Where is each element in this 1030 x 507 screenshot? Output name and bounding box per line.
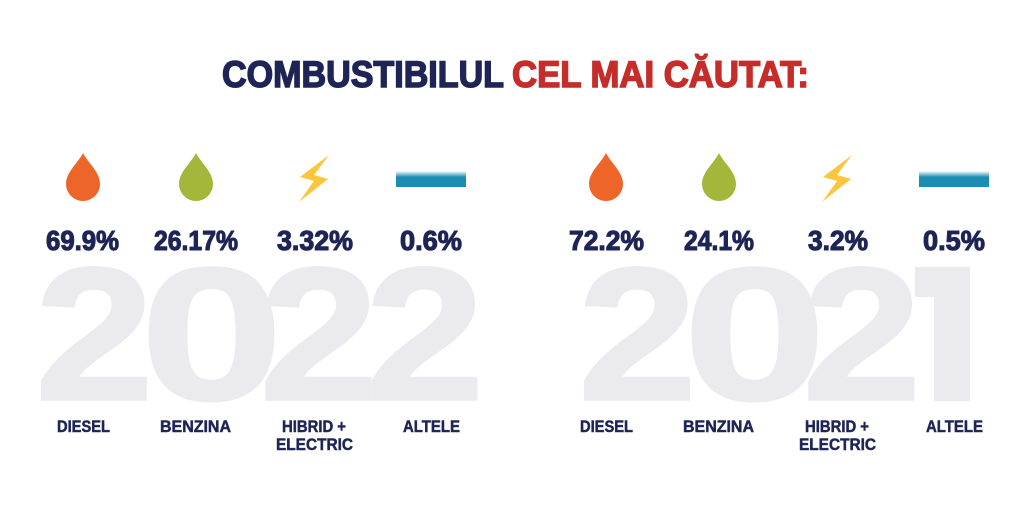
year number 2021: 1 (879, 229, 1022, 440)
percentage diesel 2022: 69.9% (46, 225, 119, 256)
label altele 2022: ALTELE (403, 418, 460, 436)
percentage hybrid 2021: 3.2% (808, 225, 868, 256)
label diesel 2021: DIESEL (580, 418, 633, 436)
year number 2021: 2 (578, 228, 697, 440)
year number 2022: 0 (140, 229, 283, 440)
label hibrid electric 2021: HIBRID + (805, 418, 869, 436)
label hibrid electric 2022 (276, 418, 353, 454)
year number 2021: 2 (802, 228, 921, 440)
percentage diesel 2021: 72.2% (569, 225, 644, 256)
label benzina 2022: BENZINA (160, 418, 231, 436)
icon: orange drop diesel (66, 153, 100, 201)
icon: blue bar other (919, 171, 989, 187)
year number 2022: 2 (260, 228, 378, 440)
label hibrid electric 2021 (799, 418, 876, 454)
label hibrid electric 2021: ELECTRIC (799, 436, 876, 454)
year number 2022 (35, 228, 484, 440)
icon: orange drop diesel (589, 153, 623, 201)
label hibrid electric 2022: HIBRID + (282, 418, 346, 436)
icon: blue bar other (396, 171, 466, 187)
icon: green drop benzina (179, 153, 213, 201)
icon: lightning bolt hybrid electric (822, 155, 852, 202)
percentage other 2022: 0.6% (400, 225, 462, 256)
label diesel 2022: DIESEL (57, 418, 110, 436)
title: CEL MAI CĂUTAT: (512, 54, 809, 95)
title (222, 54, 809, 95)
label hibrid electric 2022: ELECTRIC (276, 436, 353, 454)
year number 2021: 0 (683, 229, 826, 440)
title: COMBUSTIBILUL (222, 54, 504, 95)
percentage other 2021: 0.5% (923, 225, 985, 256)
label benzina 2021: BENZINA (683, 418, 754, 436)
year number 2022: 2 (366, 228, 484, 440)
percentage benzina 2022: 26.17% (154, 225, 238, 256)
icon: lightning bolt hybrid electric (299, 155, 329, 202)
icon: green drop benzina (702, 153, 736, 201)
panel: 2022 (35, 153, 484, 454)
panel: 2021 (569, 153, 1022, 454)
label altele 2021: ALTELE (926, 418, 983, 436)
percentage hybrid 2022: 3.32% (277, 225, 353, 256)
percentage benzina 2021: 24.1% (684, 225, 754, 256)
year number 2022: 2 (35, 228, 154, 440)
year number 2021 (584, 266, 970, 402)
